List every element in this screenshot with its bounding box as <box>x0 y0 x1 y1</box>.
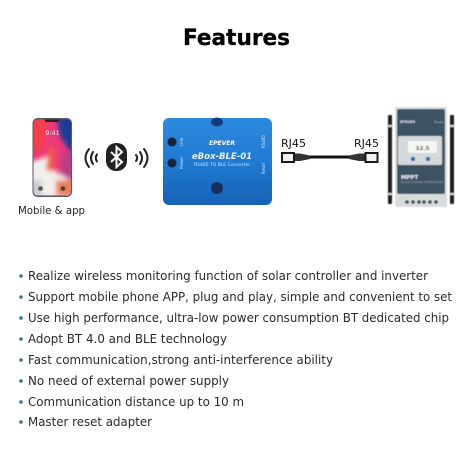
device: eBox-BLE-01 adapter: Power <box>179 157 184 169</box>
device: eBox-BLE-01 adapter: EPEVER <box>209 140 235 147</box>
label: RJ45 left: RJ45 <box>281 138 306 150</box>
device: MPPT solar controller <box>388 107 454 207</box>
device: eBox-BLE-01 adapter <box>163 118 272 205</box>
device: eBox-BLE-01 adapter: eBox-BLE-01 <box>192 152 252 162</box>
device: eBox-BLE-01 adapter: Reset <box>261 162 266 174</box>
feature list <box>19 268 452 429</box>
device: eBox-BLE-01 adapter: Link <box>179 137 184 146</box>
list item 6: No need of external power supply <box>28 373 230 388</box>
icon: bluetooth with signal waves <box>86 143 148 171</box>
device: MPPT solar controller: 12.5 <box>416 146 429 152</box>
device: MPPT solar controller: MPPT <box>401 175 419 181</box>
device: MPPT solar controller: Tracer <box>433 120 444 124</box>
device: MPPT solar controller: EPEVER <box>400 120 415 124</box>
list item 4: Adopt BT 4.0 and BLE technology <box>28 331 228 346</box>
list item 3: Use high performance, ultra-low power consumption BT dedicated chip <box>28 310 449 325</box>
device: eBox-BLE-01 adapter: RS485 <box>261 135 266 148</box>
icon: smartphone <box>32 118 72 197</box>
device: MPPT solar controller: SOLAR CHARGE CONTROLLER <box>401 180 443 184</box>
list item 8: Master reset adapter <box>28 414 153 429</box>
list item 1: Realize wireless monitoring function of solar controller and inverter <box>28 268 429 283</box>
list item 7: Communication distance up to 10 m <box>28 394 244 409</box>
icon: RJ45 cable <box>282 153 378 162</box>
label: mobile and app: Mobile & app <box>18 204 85 217</box>
device: eBox-BLE-01 adapter: RS485 TO BLE Converter <box>194 162 250 168</box>
title: Features <box>183 26 290 51</box>
label: RJ45 right: RJ45 <box>354 138 379 150</box>
icon: smartphone: 9:41 <box>45 129 60 137</box>
list item 2: Support mobile phone APP, plug and play, simple and convenient to set <box>28 289 452 304</box>
list item 5: Fast communication,strong anti-interference ability <box>28 352 334 367</box>
